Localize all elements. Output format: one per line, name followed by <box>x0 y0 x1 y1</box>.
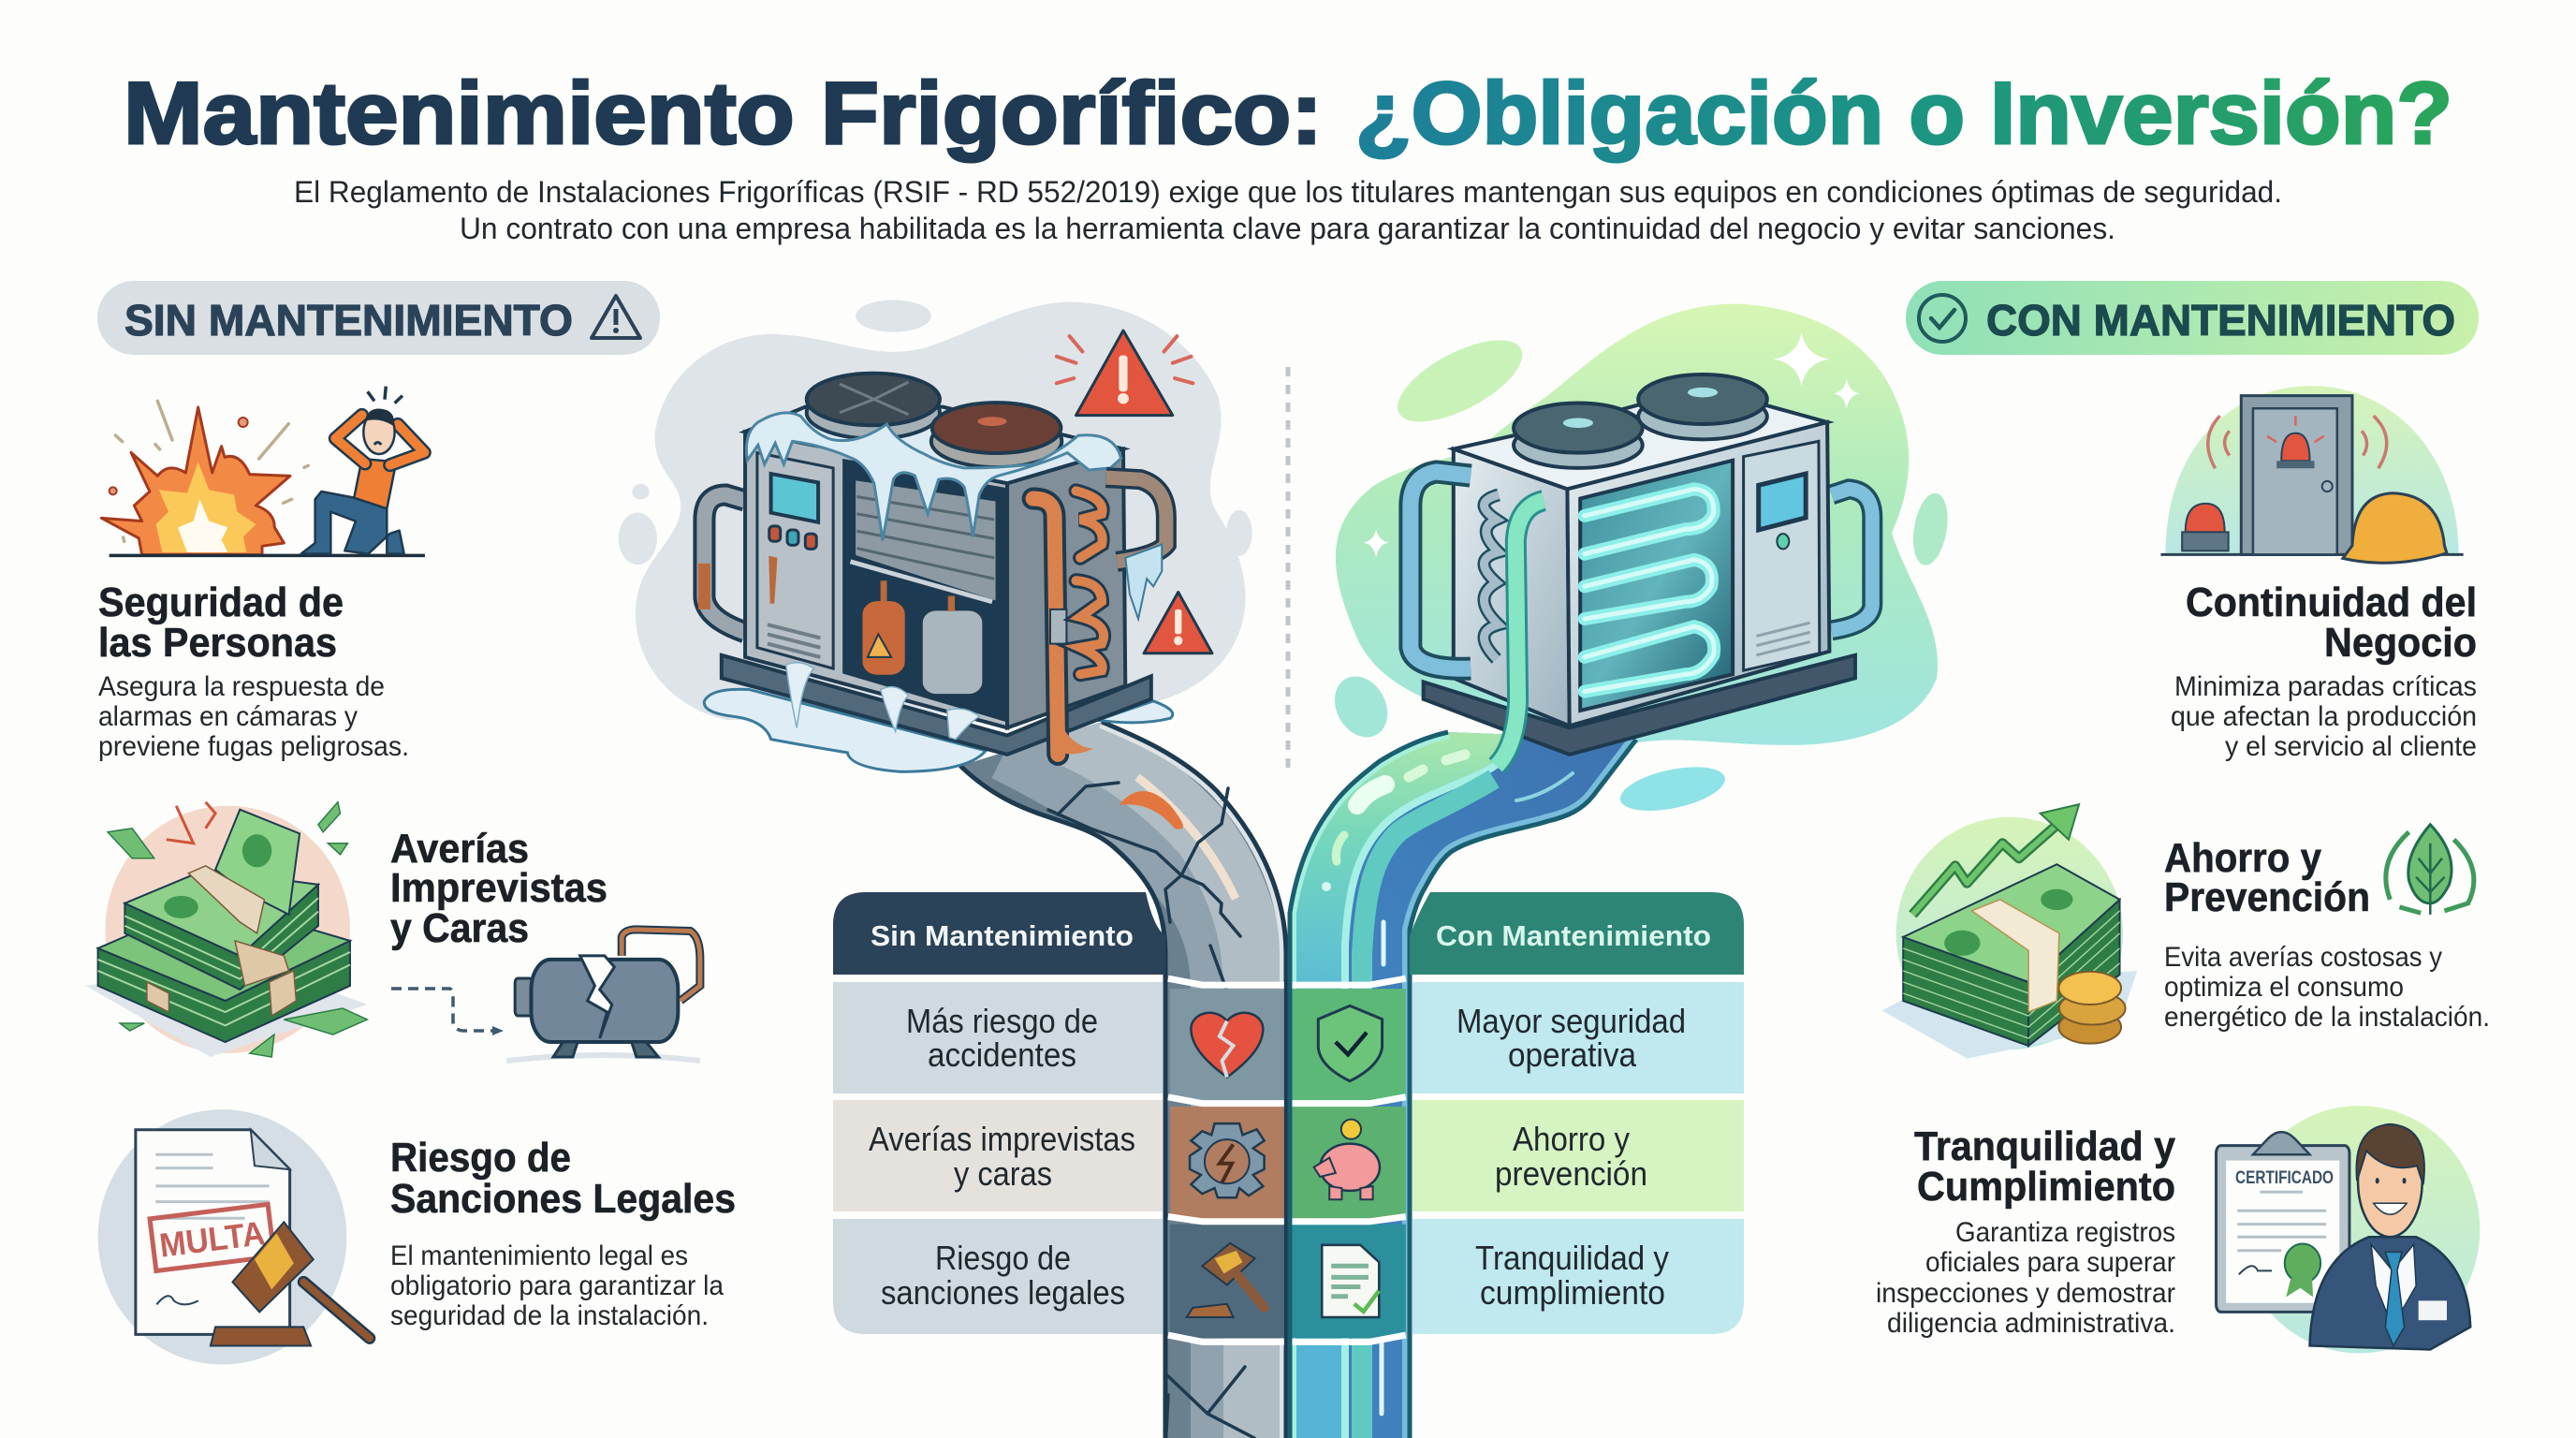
body text: diligencia administrativa. <box>1887 1308 2175 1339</box>
body text: seguridad de la instalación. <box>390 1300 709 1331</box>
pipe: clean blue-green <box>1282 721 1636 1438</box>
heading: Riesgo de <box>390 1135 571 1181</box>
icon: piggy bank <box>1314 1120 1380 1199</box>
body text: Asegura la respuesta de <box>98 671 385 702</box>
heading <box>2164 835 2370 920</box>
row 2 sin: y caras <box>954 1154 1052 1193</box>
heading <box>390 1135 736 1222</box>
compressor: con mantenimiento <box>1411 374 1872 766</box>
illustration: money and growth <box>1881 804 2137 1059</box>
ice drips on base <box>786 663 979 740</box>
body text: y el servicio al cliente <box>2225 731 2477 762</box>
warning triangle small <box>1144 593 1212 653</box>
illustration: fine document and gavel <box>98 1109 346 1364</box>
subtitle <box>294 175 2282 245</box>
row 2 sin <box>833 1100 1163 1211</box>
heading: Ahorro y <box>2164 835 2321 881</box>
icon: leaf <box>2386 825 2474 915</box>
body text: El mantenimiento legal es <box>390 1240 688 1271</box>
ice on top <box>746 413 1121 540</box>
subtitle: Un contrato con una empresa habilitada es la herramienta clave para garantizar la continuidad del negocio y evitar sanciones. <box>460 212 2115 245</box>
heading: Negocio <box>2324 620 2477 666</box>
body text <box>2171 671 2477 762</box>
table header: sin <box>833 892 1165 975</box>
icon: broken gear <box>1190 1123 1265 1197</box>
table header: sin: Sin Mantenimiento <box>871 919 1134 952</box>
pill: sin mantenimiento <box>97 281 660 355</box>
puddle <box>704 689 1173 771</box>
table header: con <box>1410 892 1744 975</box>
row 1 sin <box>833 982 1163 1093</box>
heading: Sanciones Legales <box>390 1176 736 1222</box>
body text: optimiza el consumo <box>2164 972 2404 1003</box>
arrow: dashed to compressor <box>391 989 496 1031</box>
row 1 con: operativa <box>1508 1035 1637 1074</box>
table header: con: Con Mantenimiento <box>1436 919 1711 952</box>
title: Mantenimiento Frigorífico: <box>124 64 1323 162</box>
icon: gavel <box>211 1222 370 1345</box>
illustration: broken compressor <box>506 930 700 1061</box>
illustration: door, alarm and helmet <box>2160 386 2464 563</box>
pill: con mantenimiento <box>1906 281 2479 355</box>
item: tranquilidad y cumplimiento <box>1876 1106 2480 1353</box>
body text <box>1876 1217 2175 1339</box>
heading: Averías <box>390 826 529 872</box>
row 1 sin: accidentes <box>928 1035 1076 1074</box>
compressor: sin mantenimiento <box>704 330 1212 771</box>
icon: document check <box>1322 1245 1379 1317</box>
row 2 sin: Averías imprevistas <box>869 1120 1135 1158</box>
title: ¿Obligación o Inversión? <box>1355 64 2452 162</box>
heading: Cumplimiento <box>1917 1164 2175 1210</box>
row 1 sin: Más riesgo de <box>906 1002 1098 1040</box>
center dotted divider <box>1286 367 1290 770</box>
item: averias imprevistas <box>86 802 700 1061</box>
row 1 con <box>1412 982 1744 1093</box>
row 1 con: Mayor seguridad <box>1456 1002 1686 1040</box>
heading: y Caras <box>390 905 529 951</box>
body text: energético de la instalación. <box>2164 1002 2490 1033</box>
body text: Evita averías costosas y <box>2164 942 2442 973</box>
body text: Garantiza registros <box>1955 1217 2175 1248</box>
body text: previene fugas peligrosas. <box>98 731 409 762</box>
heading <box>390 826 607 951</box>
body text <box>98 671 409 762</box>
row 3 sin <box>833 1219 1163 1334</box>
heading <box>1914 1123 2175 1210</box>
body text: inspecciones y demostrar <box>1876 1278 2175 1309</box>
certificate label: CERTIFICADO <box>2235 1168 2334 1188</box>
illustration: torn money stacks <box>86 802 367 1057</box>
comparison table <box>833 892 1744 1334</box>
row 3 sin: sanciones legales <box>881 1273 1125 1312</box>
title <box>124 64 2452 162</box>
pill: con mantenimiento: CON MANTENIMIENTO <box>1986 296 2455 345</box>
row 2 con <box>1412 1100 1744 1211</box>
body text: obligatorio para garantizar la <box>390 1270 724 1301</box>
heading <box>2186 580 2477 666</box>
heading: Imprevistas <box>390 865 607 911</box>
icon: broken heart <box>1191 1013 1263 1078</box>
item: seguridad de las personas <box>98 387 425 762</box>
item: ahorro y prevencion <box>1881 804 2490 1059</box>
illustration: explosion and worker <box>101 387 425 555</box>
icon: shield <box>1318 1005 1383 1081</box>
icon: gavel <box>1187 1243 1265 1317</box>
row 3 con: Tranquilidad y <box>1475 1239 1669 1277</box>
backdrop blob: sin mantenimiento <box>619 300 1252 720</box>
heading: Prevención <box>2164 874 2370 920</box>
pipe icon cells <box>1168 978 1406 1342</box>
row 2 con: prevención <box>1495 1154 1647 1193</box>
body text <box>2164 942 2490 1033</box>
body text: oficiales para superar <box>1925 1247 2175 1278</box>
pill: sin mantenimiento: SIN MANTENIMIENTO <box>124 296 573 345</box>
body text: alarmas en cámaras y <box>98 701 358 732</box>
row 3 con: cumplimiento <box>1480 1273 1665 1312</box>
heading <box>98 580 344 666</box>
body text <box>390 1240 724 1331</box>
warning triangle large <box>1057 330 1193 416</box>
row 3 sin: Riesgo de <box>935 1239 1071 1277</box>
heading: las Personas <box>98 620 337 666</box>
backdrop blob: con mantenimiento <box>1325 303 1953 819</box>
subtitle: El Reglamento de Instalaciones Frigoríficas (RSIF - RD 552/2019) exige que los titulares mantengan sus equipos en condiciones óptimas de seguridad. <box>294 175 2282 209</box>
illustration: certificate and technician <box>2217 1106 2480 1353</box>
heading: Seguridad de <box>98 580 344 625</box>
item: sanciones legales <box>98 1109 736 1364</box>
item: continuidad del negocio <box>2160 386 2477 762</box>
body text: Minimiza paradas críticas <box>2174 671 2477 702</box>
row 2 con: Ahorro y <box>1513 1120 1630 1158</box>
body text: que afectan la producción <box>2171 701 2477 732</box>
stamp: multa: MULTA <box>157 1213 267 1265</box>
heading: Tranquilidad y <box>1914 1123 2175 1169</box>
pipe: degraded grey <box>960 722 1286 1438</box>
heading: Continuidad del <box>2186 580 2477 625</box>
row 3 con <box>1412 1219 1744 1334</box>
